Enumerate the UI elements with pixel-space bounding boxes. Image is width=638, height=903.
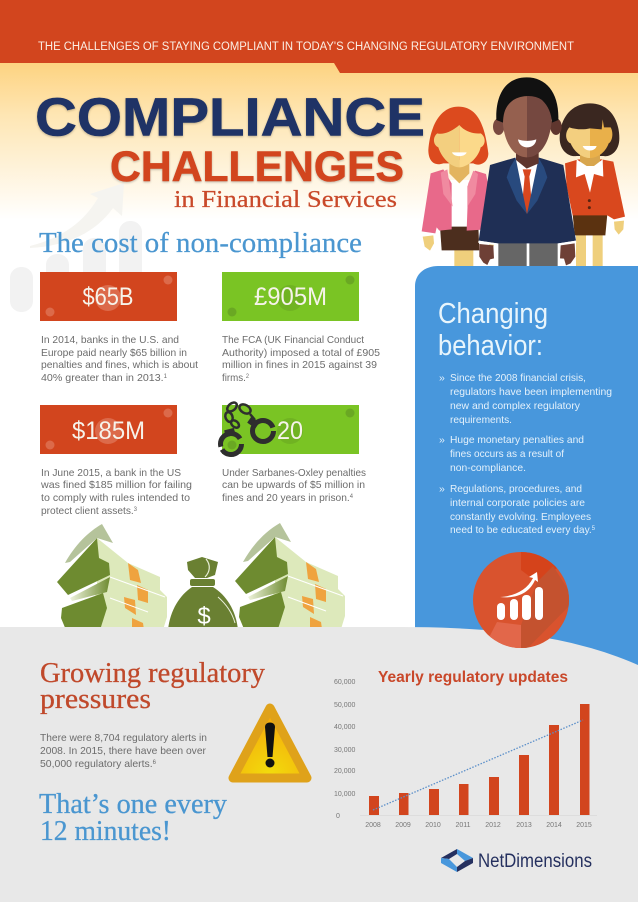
heading: growing regulatory pressures (40, 658, 265, 715)
bullet list: Regulations, procedures, and (450, 483, 582, 495)
icon: left stack of banknotes (57, 524, 167, 630)
y axis labels: 10,000 (334, 791, 356, 798)
text: 20 years detail: 4 (350, 494, 354, 500)
bullet list: 5 (592, 526, 596, 532)
panel: growing regulatory pressures background (0, 627, 638, 902)
icon: warning triangle (233, 708, 307, 778)
bullet list: » (439, 434, 445, 446)
y axis labels: 60,000 (334, 679, 356, 686)
text: £905M detail: Authority) imposed a total of £905 (222, 347, 380, 359)
stat card: $185M: $185M (72, 417, 145, 445)
x axis labels: 2015 (576, 822, 592, 829)
text: £905M detail: firms. (222, 372, 248, 384)
header banner (0, 0, 638, 73)
bullet list: fines occurs as a result of (450, 448, 564, 460)
text: $65B detail: penalties and fines, which is about (41, 359, 198, 371)
stat card: 20 years: 20 (277, 417, 303, 445)
bullet list: need to be educated every day. (450, 524, 596, 536)
section heading: cost of non-compliance: The cost of non-compliance (39, 228, 362, 259)
stat card: £905M: £905M (254, 283, 327, 311)
text: $65B detail (41, 334, 198, 384)
text: 20 years detail: can be upwards of $5 million in (222, 479, 365, 491)
stat card: 20 years (222, 405, 359, 454)
bullet list: Since the 2008 financial crisis, (450, 372, 586, 384)
logo: NetDimensions (441, 849, 592, 872)
text: $65B detail: 1 (164, 374, 168, 380)
text: £905M detail: million in fines in 2015 against 39 (222, 359, 377, 371)
text: regulatory alerts: There were 8,704 regulatory alerts in (40, 732, 207, 744)
bullet list: requirements. (450, 414, 512, 426)
y axis labels (334, 679, 356, 820)
text: £905M detail: 2 (246, 374, 250, 380)
stat card: $185M (40, 405, 177, 454)
y axis labels: 20,000 (334, 768, 356, 775)
text: 20 years detail (222, 467, 366, 504)
text: $185M detail: 3 (134, 507, 138, 513)
bar chart: yearly regulatory updates (334, 679, 597, 829)
callout: one every 12 minutes: 12 minutes! (40, 815, 171, 847)
y axis labels: 40,000 (334, 724, 356, 731)
text: regulatory alerts (40, 732, 207, 770)
heading: growing regulatory pressures: pressures (40, 684, 151, 715)
title: compliance: COMPLIANCE (35, 88, 425, 148)
bullet list: non-compliance. (450, 462, 526, 474)
bars (369, 704, 590, 815)
text: £905M detail (222, 334, 380, 384)
text: $65B detail: In 2014, banks in the U.S. and (41, 334, 179, 346)
stat card: $65B: $65B (82, 283, 134, 311)
text: regulatory alerts: 50,000 regulatory alerts. (40, 758, 153, 770)
stat card: $65B (40, 272, 177, 321)
bullet list: new and complex regulatory (450, 400, 581, 412)
text: regulatory alerts: 6 (153, 760, 157, 766)
bullet list: » (439, 483, 445, 495)
bullet list: » (439, 372, 445, 384)
bullet list: constantly evolving. Employees (450, 511, 591, 523)
text: £905M detail: The FCA (UK Financial Conduct (222, 334, 364, 346)
x axis labels (365, 822, 592, 829)
background gradient (0, 60, 638, 220)
callout: one every 12 minutes (39, 788, 227, 847)
callout: one every 12 minutes: That’s one every (39, 788, 227, 820)
text: $185M detail: protect client assets. (41, 505, 137, 517)
panel heading (438, 298, 548, 362)
y axis labels: 0 (336, 813, 340, 820)
text: $65B detail: 40% greater than in 2013. (41, 372, 162, 384)
text: $185M detail: In June 2015, a bank in the US (41, 467, 181, 479)
panel: changing behavior (415, 266, 638, 680)
bullet list: Huge monetary penalties and (450, 434, 584, 446)
illustration: three business people (422, 77, 625, 270)
x axis labels: 2011 (455, 822, 471, 829)
text: $185M detail: was fined $185 million for failing (40, 479, 192, 491)
x axis labels: 2012 (485, 822, 501, 829)
y axis labels: 30,000 (334, 747, 356, 754)
text: $185M detail: to comply with rules intended to (41, 492, 190, 504)
icon: rising chart badge (473, 552, 569, 648)
icon: handcuffs (220, 401, 274, 454)
icon: money bag (168, 557, 238, 630)
person: man in suit (478, 77, 576, 268)
x axis labels: 2008 (365, 822, 381, 829)
title: challenges: CHALLENGES (110, 144, 404, 191)
subtitle: in Financial Services (174, 186, 397, 213)
faded growth chart watermark (10, 183, 142, 312)
icon: money bag: $ (197, 603, 211, 630)
panel heading: behavior: (438, 330, 543, 362)
person: left woman (422, 107, 497, 270)
panel heading: Changing (438, 298, 548, 330)
x axis labels: 2009 (395, 822, 411, 829)
icon: right stack of banknotes (235, 523, 345, 629)
x axis labels: 2010 (425, 822, 441, 829)
header tagline: THE CHALLENGES OF STAYING COMPLIANT IN TODAY'S CHANGING REGULATORY ENVIRONMENT (38, 41, 574, 53)
person: right woman (560, 103, 625, 270)
bullet list (439, 372, 612, 536)
text: 20 years detail: fines and 20 years in prison. (222, 492, 353, 504)
text: 20 years detail: Under Sarbanes-Oxley penalties (222, 467, 366, 479)
text: $185M detail (40, 467, 192, 517)
text: regulatory alerts: 2008. In 2015, there have been over (40, 745, 206, 757)
text: $65B detail: Europe paid nearly $65 billion in (41, 347, 187, 359)
heading: growing regulatory pressures: Growing regulatory (40, 658, 265, 689)
bullet list: internal corporate policies are (450, 497, 585, 509)
logo: NetDimensions: NetDimensions (478, 851, 592, 872)
x axis labels: 2013 (516, 822, 532, 829)
chart title: Yearly regulatory updates (378, 669, 568, 686)
trend line (373, 720, 583, 810)
x axis labels: 2014 (546, 822, 562, 829)
y axis labels: 50,000 (334, 702, 356, 709)
stat card: £905M (222, 272, 359, 321)
bullet list: regulators have been implementing (450, 386, 612, 398)
